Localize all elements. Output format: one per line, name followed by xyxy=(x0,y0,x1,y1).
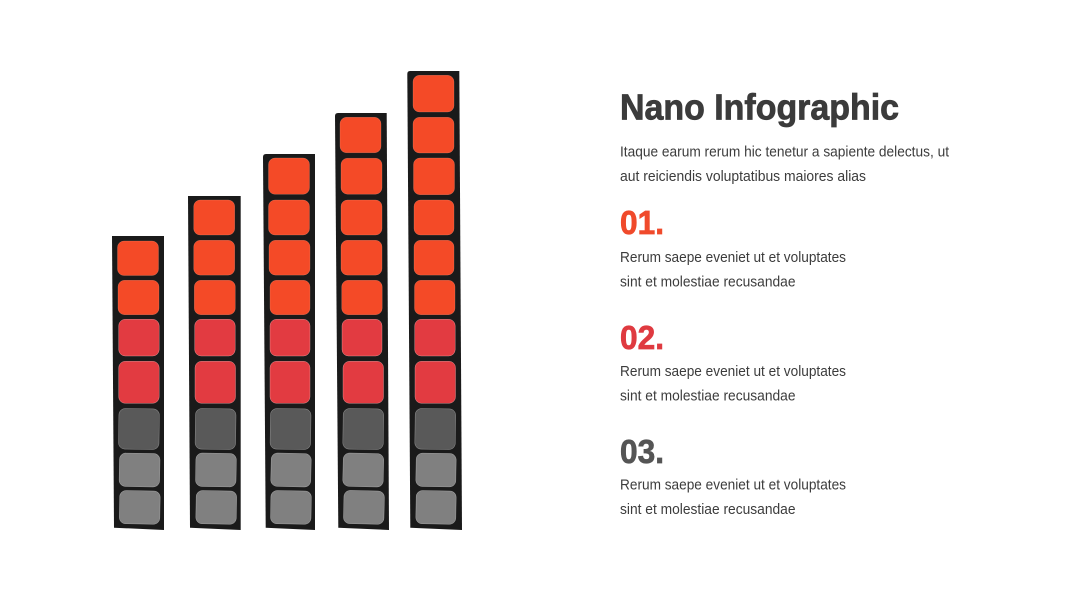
number 03: 03. xyxy=(620,433,664,470)
bar 4 red cells xyxy=(342,319,384,403)
intro text: Itaque earum rerum hic tenetur a sapiente delectus, ut xyxy=(620,144,949,160)
bar 1 gray cells xyxy=(118,408,160,524)
title: Nano Infographic xyxy=(620,86,899,128)
bar 4 xyxy=(335,113,389,530)
bar 1 xyxy=(112,236,164,530)
bar 3 gray cells xyxy=(270,408,311,524)
bar chart xyxy=(112,71,462,530)
bar 2 red cells xyxy=(195,319,236,403)
item 03 text: sint et molestiae recusandae xyxy=(620,502,796,518)
item 03 xyxy=(620,433,846,518)
bar 3 red cells xyxy=(270,319,310,403)
item 01 text: sint et molestiae recusandae xyxy=(620,275,796,291)
intro text: aut reiciendis voluptatibus maiores alias xyxy=(620,169,866,185)
bar 3 orange cells xyxy=(268,158,310,315)
bar 4 orange cells xyxy=(340,117,382,315)
bar 2 orange cells xyxy=(194,200,235,315)
intro text xyxy=(620,144,949,185)
bar 5 gray cells xyxy=(415,408,456,524)
item 01 xyxy=(620,204,846,291)
item 02 text: Rerum saepe eveniet ut et voluptates xyxy=(620,364,846,380)
bar 1 orange cells xyxy=(118,241,159,315)
number 01: 01. xyxy=(620,204,664,241)
item 01 text xyxy=(620,250,846,291)
bar 2 xyxy=(188,196,241,530)
item 01 text: Rerum saepe eveniet ut et voluptates xyxy=(620,250,846,266)
item 03 text: Rerum saepe eveniet ut et voluptates xyxy=(620,477,846,493)
bar 5 orange cells xyxy=(413,75,455,315)
number 02: 02. xyxy=(620,319,664,356)
bar 4 gray cells xyxy=(343,408,385,524)
item 02 text xyxy=(620,364,846,405)
bar 5 red cells xyxy=(415,319,456,403)
item 02 text: sint et molestiae recusandae xyxy=(620,389,796,405)
bar 2 gray cells xyxy=(195,408,237,524)
bar 3 xyxy=(263,154,315,530)
item 03 text xyxy=(620,477,846,518)
item 02 xyxy=(620,319,846,405)
bar 1 red cells xyxy=(119,319,159,403)
bar 5 xyxy=(407,71,462,530)
